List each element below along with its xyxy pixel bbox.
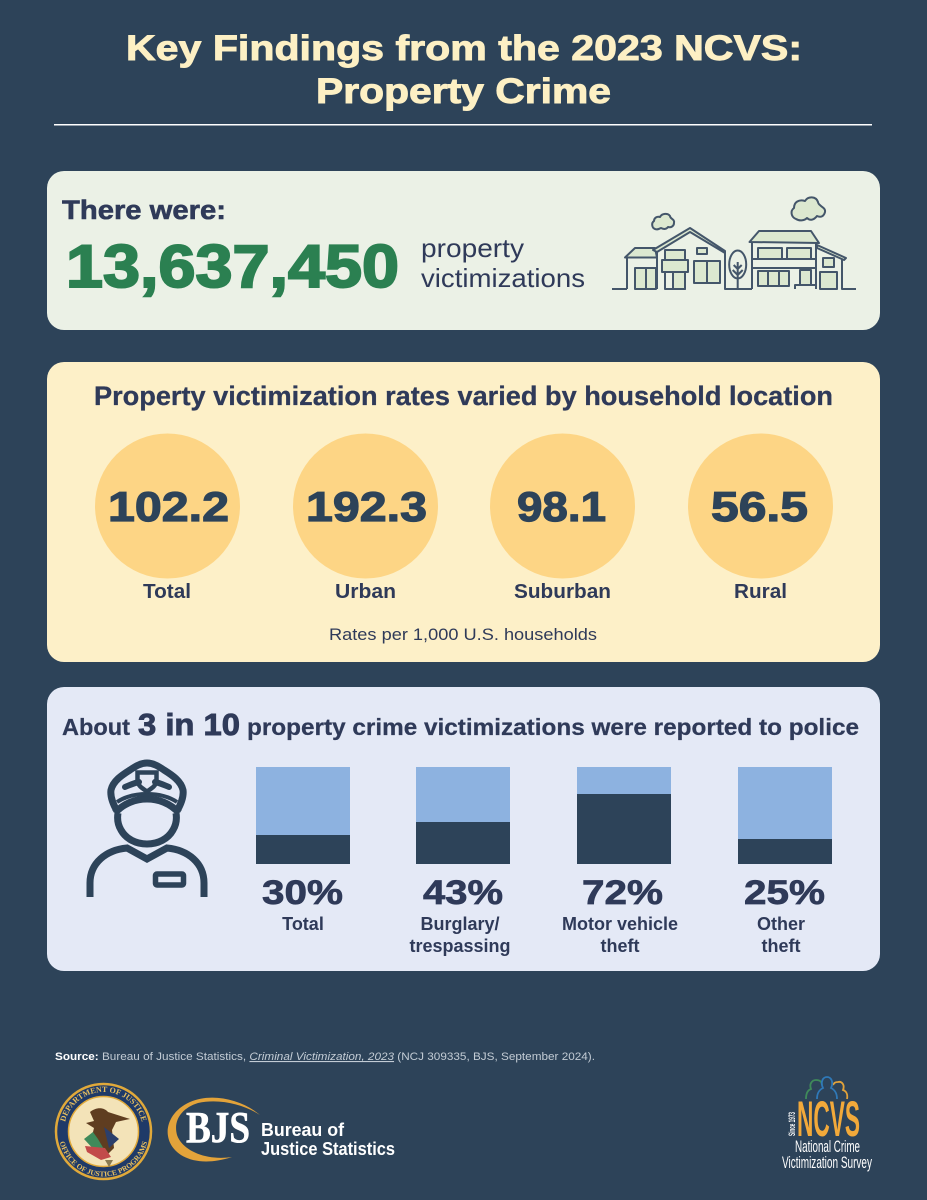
logo: DOJ seal: OFFICE OF JUSTICE PROGRAMS [60,1141,147,1176]
logo: BJS: Bureau of [261,1120,345,1140]
icon: houses [612,197,856,289]
chart: other theft 25%: theft [762,936,800,956]
note: rates: Rates per 1,000 U.S. households [329,625,597,644]
chart: motor vehicle 72% [562,767,678,956]
stat: urban: Urban [335,581,396,603]
title: Key Findings from the 2023 NCVS: [126,29,802,68]
stat: rural: Rural [734,581,787,603]
label: property victimizations: victimizations [421,263,585,293]
icon: police officer [90,763,204,897]
chart: burglary 43% [409,767,511,956]
heading: 3 in 10: 3 in 10 [138,707,240,742]
chart: other theft 25%: Other [757,914,805,934]
title: Property Crime [316,72,611,111]
chart: burglary 43%: trespassing [409,936,511,956]
stat: rural: 56.5 [711,483,808,530]
logo: NCVS [782,1077,872,1172]
logo: BJS: Justice Statistics [261,1139,395,1159]
logo: BJS [168,1098,395,1161]
chart: motor vehicle 72%: 72% [582,874,663,912]
big number: 13,637,450 [66,233,399,300]
logo: NCVS: National Crime [795,1137,860,1156]
source note: Source: Bureau of Justice Statistics, Criminal Victimization, 2023 (NCJ 309335, BJS, September 2024). [55,1051,595,1063]
stat: urban [293,434,438,603]
panel: reported to police [47,687,880,971]
label: property victimizations: property [421,233,524,263]
chart: motor vehicle 72%: theft [600,936,640,956]
logo: BJS: BJS [186,1103,250,1152]
stat: suburban: Suburban [514,581,611,603]
chart: total 30%: Total [282,914,324,934]
heading: there were: There were: [62,195,226,225]
chart: burglary 43%: Burglary/ [420,914,500,934]
stat: suburban [490,434,635,603]
title [126,29,802,111]
heading: 3 in 10: About [62,714,130,740]
chart: other theft 25% [738,767,832,956]
heading: 3 in 10: property crime victimizations were reported to police [247,714,859,740]
chart: burglary 43%: 43% [423,874,503,912]
chart: motor vehicle 72%: Motor vehicle [562,914,678,934]
panel: total victimizations [47,171,880,330]
stat: total: Total [143,581,191,603]
chart: other theft 25%: 25% [744,874,825,912]
chart: total 30% [256,767,350,934]
logo: DOJ seal: DEPARTMENT OF JUSTICE [60,1086,147,1122]
chart: total 30%: 30% [262,874,343,912]
stat: suburban: 98.1 [517,483,606,530]
logo: NCVS: Since 1973 [787,1112,797,1136]
stat: total: 102.2 [108,483,229,530]
panel: rates by location [47,362,880,662]
stat: rural [688,434,833,603]
logo: DOJ seal [54,1082,152,1180]
stat: urban: 192.3 [306,483,427,530]
stat: total [95,434,240,603]
heading: rates: Property victimization rates varied by household location [94,381,833,411]
